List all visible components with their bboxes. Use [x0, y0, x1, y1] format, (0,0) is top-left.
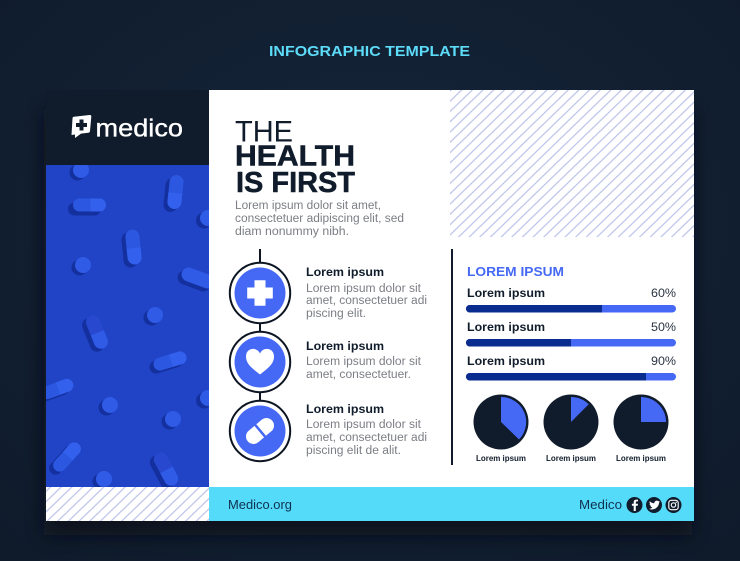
- icon: twitter: [646, 497, 662, 513]
- bar: 90 percent: Lorem ipsum: [467, 356, 545, 368]
- pie chart: third: Lorem ipsum: [616, 454, 666, 463]
- title: infographic template: INFOGRAPHIC TEMPLATE: [269, 43, 470, 60]
- pie chart: second: Lorem ipsum: [546, 454, 596, 463]
- panel: blue pills photo: [46, 165, 209, 487]
- intro text block: diam nonummy nibh.: [235, 226, 349, 238]
- intro text block: consectetuer adipiscing elit, sed: [235, 213, 404, 225]
- heading: the health is first: [235, 116, 356, 199]
- heading: the health is first: THE: [235, 116, 293, 148]
- bar: 90 percent: [466, 356, 676, 380]
- bar: 50 percent: 50%: [651, 322, 676, 334]
- icon: medico logo mark: [72, 115, 91, 138]
- logo wordmark: medico: [96, 114, 183, 142]
- icon: instagram: [666, 497, 682, 513]
- text block: item one: Lorem ipsum dolor sit: [306, 283, 422, 295]
- heading: lorem ipsum: LOREM IPSUM: [467, 264, 564, 279]
- bar: 60 percent: Lorem ipsum: [467, 288, 545, 300]
- pie chart: first: Lorem ipsum: [476, 454, 526, 463]
- icon: facebook: [626, 497, 642, 513]
- timeline of icons: [230, 249, 290, 461]
- heading: the health is first: HEALTH: [235, 140, 355, 172]
- icon: pills: [46, 165, 209, 487]
- text block: item three: Lorem ipsum: [306, 404, 384, 416]
- heading: the health is first: IS FIRST: [236, 167, 356, 199]
- bar: 50 percent: [466, 322, 676, 346]
- panel: logo header: [46, 90, 209, 165]
- pie chart: first: [474, 394, 528, 463]
- text block: item one: [306, 267, 427, 320]
- icon: heart: [230, 332, 290, 392]
- icon: capsule: [230, 401, 290, 461]
- intro text block: Lorem ipsum dolor sit amet,: [235, 200, 381, 212]
- panel: footer bar: [209, 487, 694, 521]
- text block: item three: piscing elit de alit.: [306, 445, 401, 457]
- text block: item three: [306, 404, 427, 457]
- text block: item three: Lorem ipsum dolor sit: [306, 419, 422, 431]
- bar: 60 percent: 60%: [651, 288, 676, 300]
- text block: item two: [306, 341, 422, 381]
- intro text block: [235, 200, 404, 238]
- text block: item two: amet, consectetuer.: [306, 369, 411, 381]
- bar chart: progress bars: [466, 288, 676, 380]
- bar: 90 percent: 90%: [651, 356, 676, 368]
- panel: infographic card: [35, 90, 694, 521]
- text block: item two: Lorem ipsum: [306, 341, 384, 353]
- text block: item one: Lorem ipsum: [306, 267, 384, 279]
- icon: medical cross: [230, 263, 290, 323]
- text block: item two: Lorem ipsum dolor sit: [306, 356, 422, 368]
- text block: item one: piscing elit.: [306, 308, 366, 320]
- bar: 50 percent: Lorem ipsum: [467, 322, 545, 334]
- pie chart: third: [614, 394, 668, 463]
- pie chart: second: [544, 394, 598, 463]
- footer brand name: Medico: [579, 497, 622, 512]
- footer website: Medico.org: [228, 497, 292, 512]
- text block: item one: amet, consectetuer adi: [306, 295, 427, 307]
- bar: 60 percent: [466, 288, 676, 312]
- text block: item three: amet, consectetuer adi: [306, 432, 427, 444]
